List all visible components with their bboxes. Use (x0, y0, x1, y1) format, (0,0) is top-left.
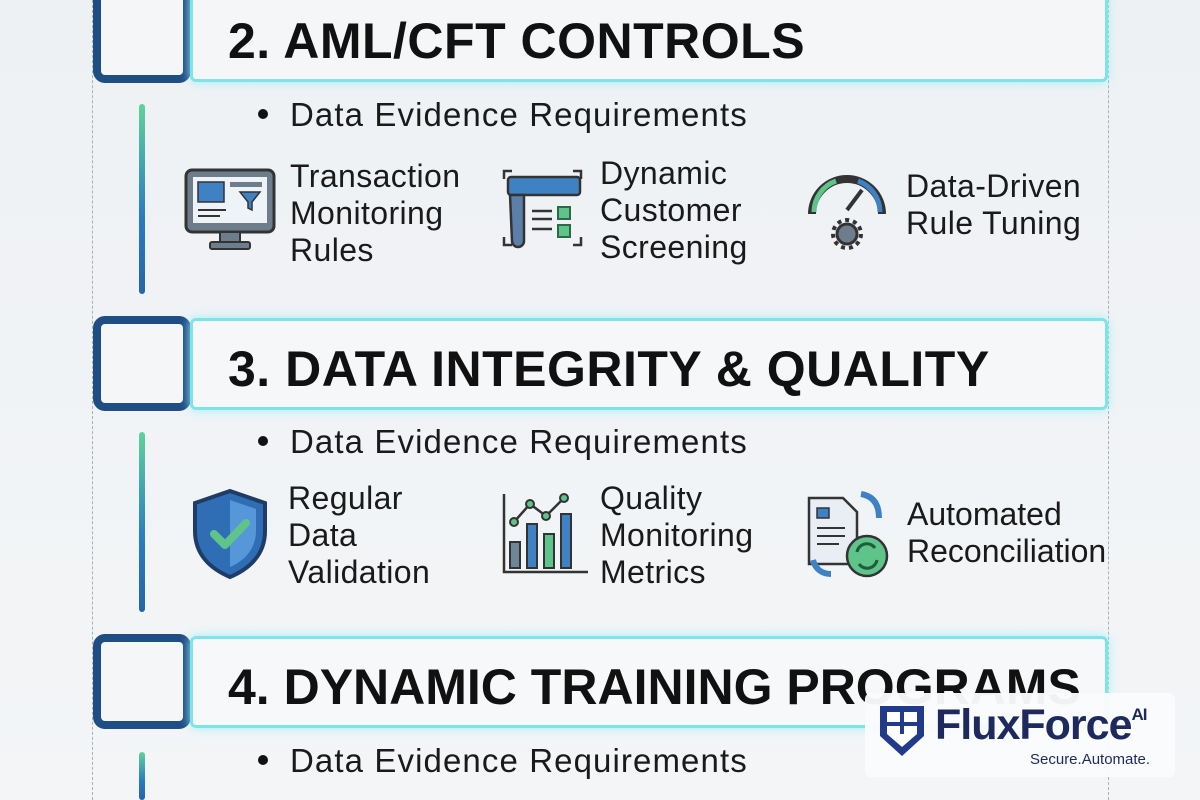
item: data-driven rule tuning: Rule Tuning (906, 205, 1081, 241)
item: dynamic customer screening: Dynamic (600, 155, 727, 191)
item: regular data validation: Data (288, 517, 357, 553)
icon: bar chart (502, 493, 588, 574)
item: automated reconciliation: Reconciliation (907, 533, 1106, 569)
item: data-driven rule tuning (808, 168, 1081, 250)
item: dynamic customer screening: Customer (600, 192, 742, 228)
item: quality monitoring metrics: Metrics (600, 554, 706, 590)
title: data integrity & quality: 3. DATA INTEGRITY & QUALITY (228, 341, 990, 397)
icon: scanner (502, 170, 582, 248)
timeline line 3 (139, 432, 145, 612)
icon: shield logo (880, 706, 924, 756)
icon: monitor (184, 168, 276, 250)
item: transaction monitoring rules: Monitoring (290, 195, 443, 231)
item: regular data validation: Regular (288, 480, 403, 516)
bullet 2: Data Evidence Requirements (290, 96, 748, 133)
item: automated reconciliation (808, 491, 1106, 578)
logo: FluxForce AI: FluxForceAI (935, 701, 1146, 749)
item: transaction monitoring rules: Transaction (290, 158, 460, 194)
item: dynamic customer screening: Screening (600, 229, 748, 265)
icon: shield check (193, 488, 267, 580)
section 4 header (93, 630, 1114, 734)
bullet 3: Data Evidence Requirements (290, 423, 748, 460)
section 2 header (93, 0, 1114, 88)
timeline line 2 (139, 104, 145, 294)
item: quality monitoring metrics (502, 480, 753, 590)
item: transaction monitoring rules: Rules (290, 232, 374, 268)
item: regular data validation (193, 480, 430, 590)
timeline line 4 (139, 752, 145, 800)
item: transaction monitoring rules (184, 158, 460, 268)
item: regular data validation: Validation (288, 554, 430, 590)
icon: gauge with gear (808, 175, 886, 250)
section 3 header (93, 312, 1114, 416)
item: dynamic customer screening (502, 155, 748, 265)
item: data-driven rule tuning: Data-Driven (906, 168, 1081, 204)
icon: document with sync (808, 491, 888, 578)
title: AML/CFT controls: 2. AML/CFT CONTROLS (228, 13, 805, 69)
bullet 4: Data Evidence Requirements (290, 742, 748, 779)
title: dynamic training programs: 4. DYNAMIC TRAINING PROGRAMS (228, 659, 1081, 715)
item: automated reconciliation: Automated (907, 496, 1062, 532)
item: quality monitoring metrics: Monitoring (600, 517, 753, 553)
logo: FluxForce AI: Secure.Automate. (1030, 751, 1150, 768)
logo: FluxForce AI (865, 693, 1175, 777)
item: quality monitoring metrics: Quality (600, 480, 702, 516)
